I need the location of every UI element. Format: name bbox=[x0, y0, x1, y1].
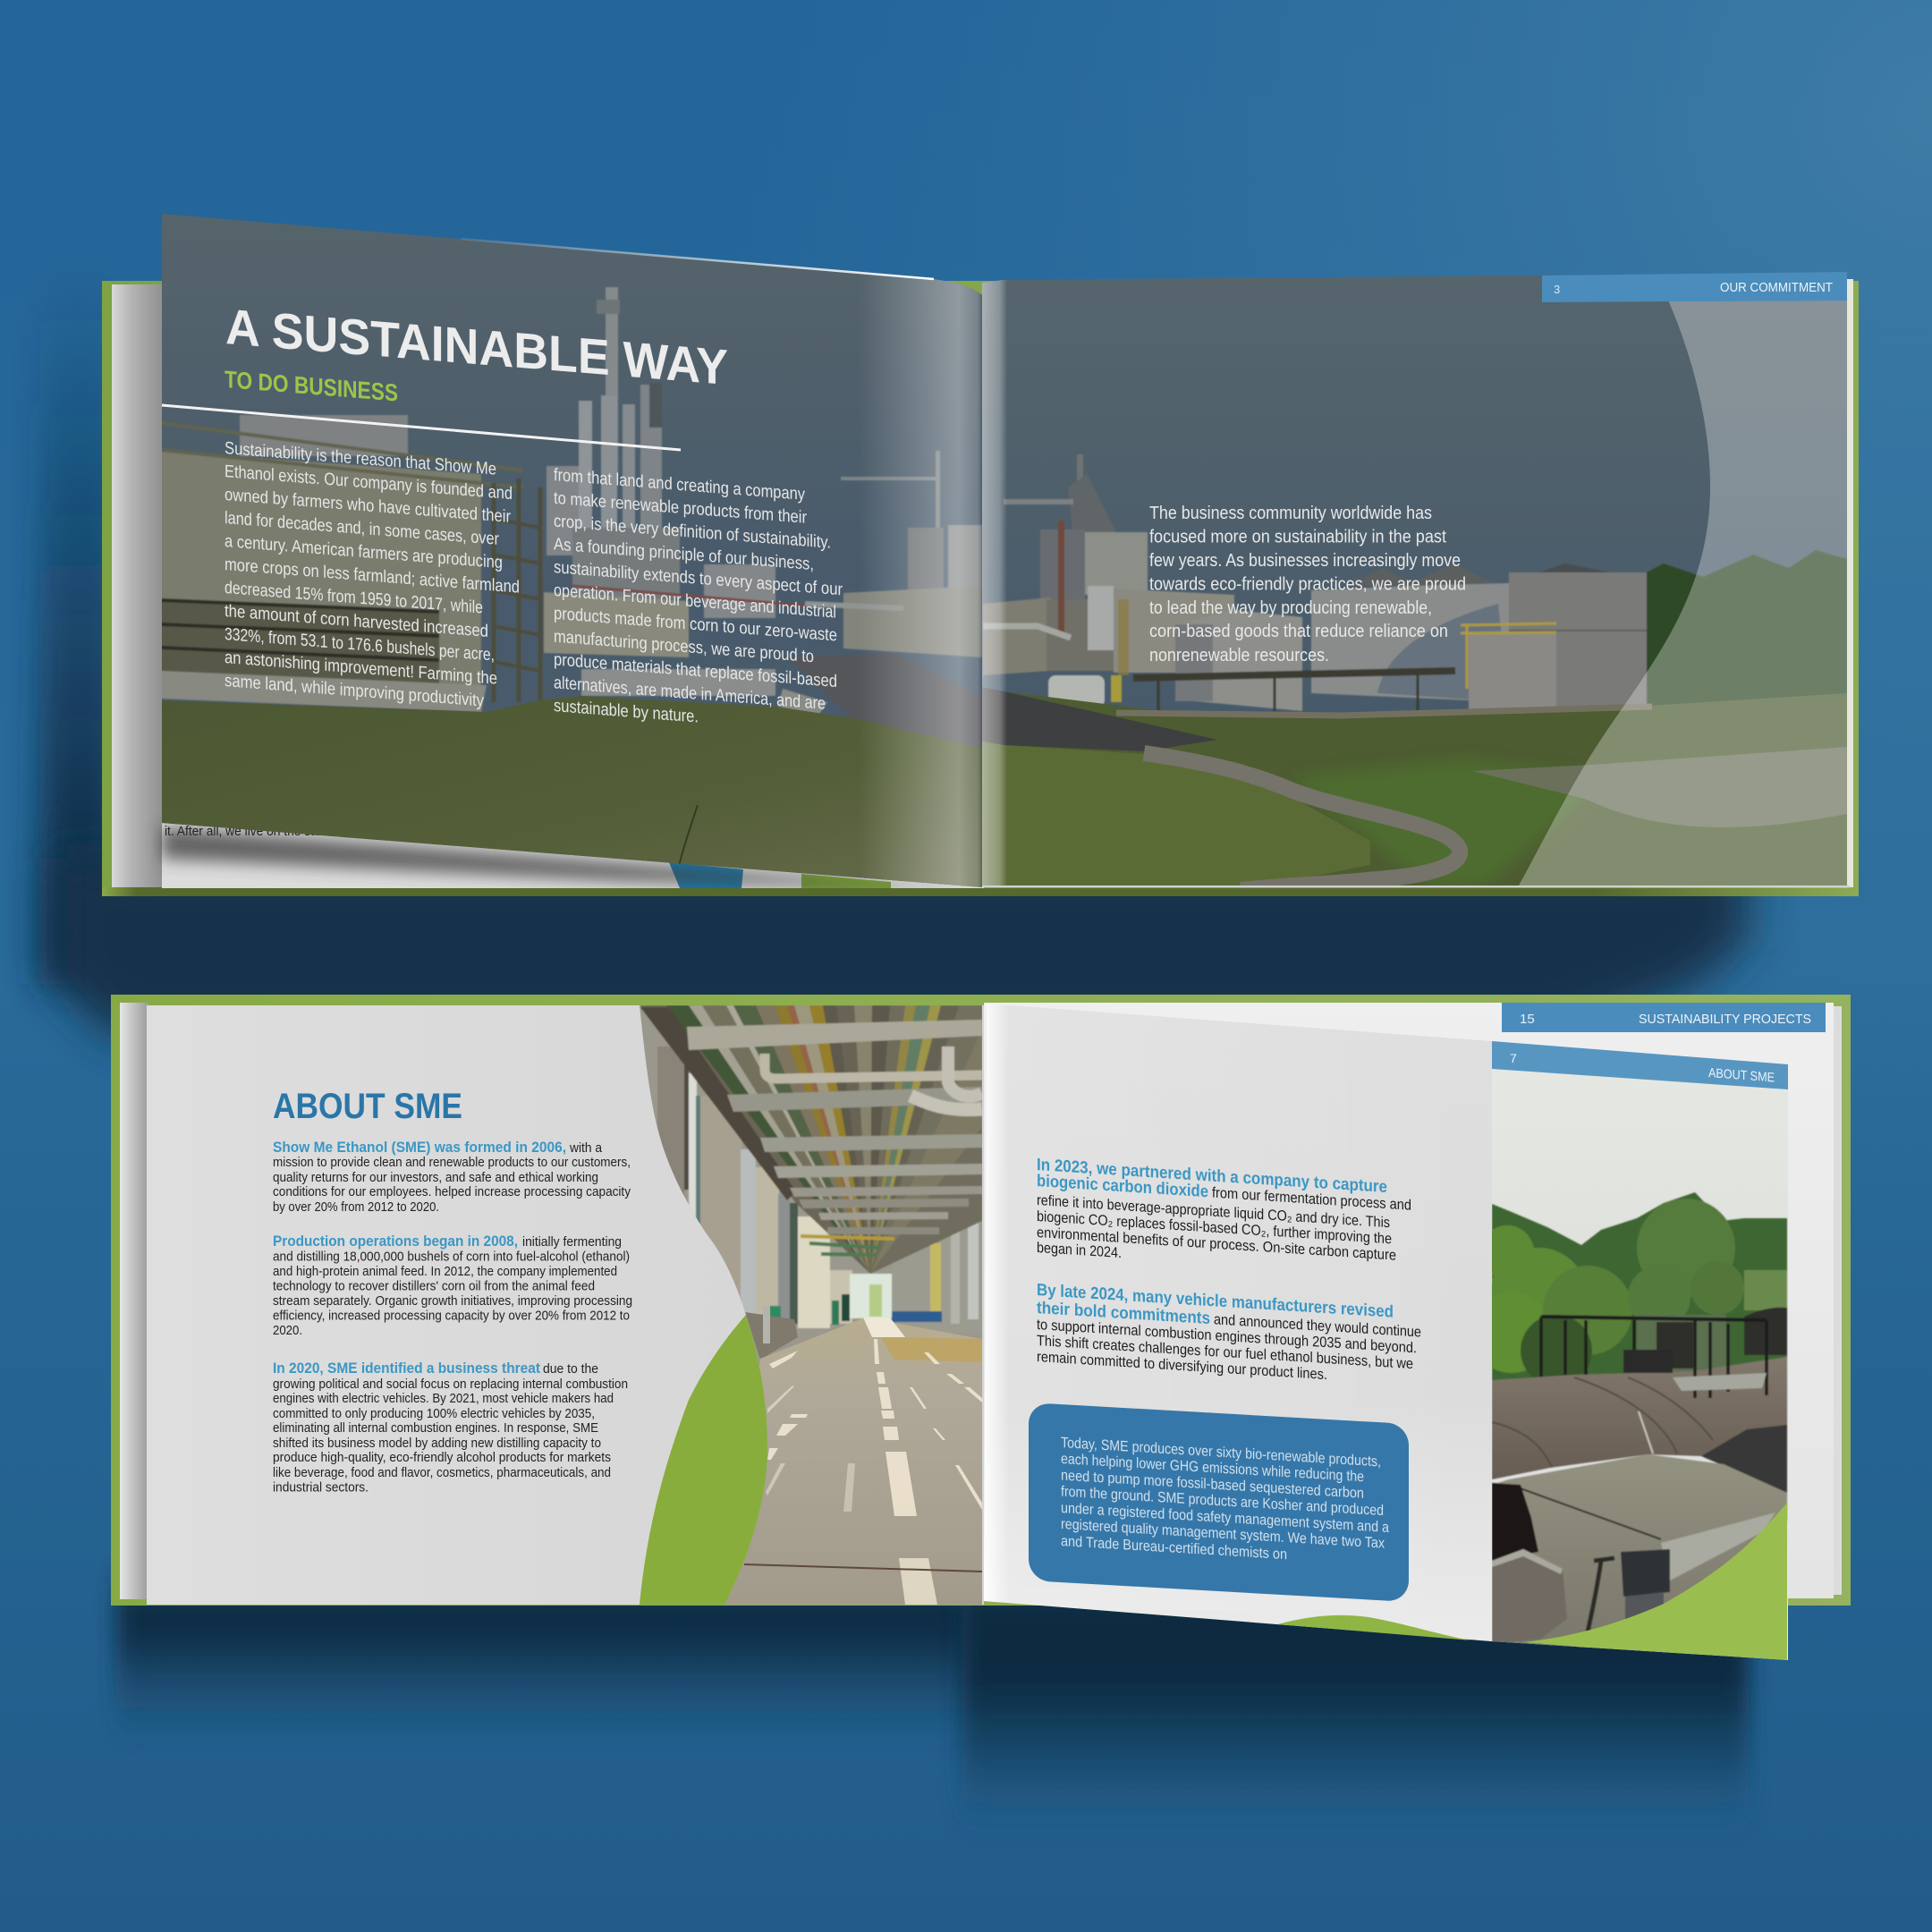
page top edge highlight bbox=[461, 239, 934, 279]
corridor photo bbox=[640, 1005, 984, 1605]
paragraph: business threat: produce high-quality, eco-friendly alcohol products for markets bbox=[273, 1450, 611, 1465]
bottom book green cover bbox=[111, 995, 1851, 1606]
right page text block: few years. As businesses increasingly move bbox=[1149, 551, 1461, 571]
blue callout box: Today, SME produces over sixty bio-renewable products, bbox=[1061, 1435, 1381, 1470]
bottom right under page bbox=[984, 1003, 1842, 1598]
title: a sustainable way: A SUSTAINABLE WAY bbox=[225, 298, 728, 395]
right page photo bbox=[982, 268, 1850, 894]
paragraph: business threat: committed to only producing 100% electric vehicles by 2035, bbox=[273, 1406, 595, 1421]
top book page stack bbox=[112, 284, 165, 887]
green curved blade bbox=[640, 1315, 767, 1605]
header tab: sustainability projects: 15 bbox=[1520, 1012, 1535, 1027]
paragraph: 2023 carbon capture: environmental benefits of our process. On-site carbon capture bbox=[1037, 1224, 1396, 1264]
left page text column 2: sustainable by nature. bbox=[554, 696, 699, 727]
right page text block: towards eco-friendly practices, we are proud bbox=[1149, 574, 1466, 594]
left page text column 1: an astonishing improvement! Farming the bbox=[225, 648, 497, 689]
green wave at bottom of flipped page bbox=[1277, 1615, 1471, 1640]
flipped page base bbox=[984, 1004, 1788, 1660]
paragraph: business threat: industrial sectors. bbox=[273, 1479, 369, 1496]
bottom left page: about SME bbox=[147, 1005, 984, 1605]
right page text block: The business community worldwide has bbox=[1149, 504, 1432, 523]
paragraph: production: Production operations began in 2008, bbox=[273, 1233, 518, 1250]
header tab: sustainability projects bbox=[1502, 1003, 1826, 1032]
left page text column 2: from that land and creating a company bbox=[554, 465, 805, 504]
paragraph: business threat bbox=[273, 1360, 628, 1496]
train tank photo bbox=[1492, 1069, 1788, 1660]
paragraph: late 2024 commitments: remain committed to diversifying our product lines. bbox=[1037, 1349, 1327, 1383]
left page text column 2: to make renewable products from their bbox=[554, 488, 807, 528]
left page text column 2: crop, is the very definition of sustainability. bbox=[554, 512, 831, 553]
paragraph: business threat: shifted its business model by adding new distilling capacity to bbox=[273, 1436, 601, 1451]
header tab: about SME: ABOUT SME bbox=[1708, 1066, 1775, 1086]
heading rule bbox=[162, 405, 681, 450]
paragraph: 2023 carbon capture: refine it into beverage-appropriate liquid CO₂ and dry ice. This bbox=[1037, 1192, 1390, 1231]
left page text column 1: a century. American farmers are producing bbox=[225, 531, 503, 572]
paragraph: formation: by over 20% from 2012 to 2020. bbox=[273, 1199, 439, 1215]
paragraph: 2023 carbon capture: biogenic CO₂ replaces fossil-based CO₂, further improving the bbox=[1037, 1208, 1392, 1247]
paragraph: business threat: In 2020, SME identified a business threat bbox=[273, 1360, 540, 1377]
left page text column 2 bbox=[554, 465, 843, 738]
paragraph: formation: conditions for our employees. helped increase processing capacity bbox=[273, 1184, 631, 1199]
green corner curve bbox=[1523, 1503, 1787, 1664]
left page text column 1: 332%, from 53.1 to 176.6 bushels per acre, bbox=[225, 624, 495, 665]
left page photo bbox=[161, 206, 985, 903]
paragraph: late 2024 commitments: and announced they would continue bbox=[1214, 1311, 1421, 1341]
right page text block: to lead the way by producing renewable, bbox=[1149, 598, 1432, 618]
left page text column 2: alternatives, are made in America, and are bbox=[554, 673, 826, 714]
paragraph: 2023 carbon capture: from our fermentation process and bbox=[1212, 1185, 1411, 1214]
right page text block bbox=[1149, 504, 1466, 665]
left page text column 1 bbox=[225, 438, 520, 714]
bottom book mockup bbox=[111, 995, 1851, 1664]
right page text block: focused more on sustainability in the past bbox=[1149, 528, 1446, 547]
paragraph: business threat: eliminating all internal combustion engines. In response, SME bbox=[273, 1420, 598, 1436]
heading: about SME: ABOUT SME bbox=[273, 1087, 462, 1126]
top left page: plant photo with title and text bbox=[161, 206, 985, 903]
left page text column 2: sustainability extends to every aspect of our bbox=[554, 557, 843, 599]
paragraph: business threat: like beverage, food and flavor, cosmetics, pharmaceuticals, and bbox=[273, 1465, 611, 1480]
blue callout box: under a registered food safety management system and a bbox=[1061, 1500, 1390, 1536]
left page text column 1: decreased 15% from 1959 to 2017, while bbox=[225, 578, 483, 618]
header tab: our commitment bbox=[1542, 272, 1847, 302]
bottom flipped page bbox=[984, 1002, 1788, 1664]
left page text column 1: Ethanol exists. Our company is founded and bbox=[225, 462, 513, 504]
paragraph: production: and distilling 18,000,000 bushels of corn into fuel-alcohol (ethanol) bbox=[273, 1249, 630, 1265]
blue callout box: each helping lower GHG emissions while reducing the bbox=[1061, 1451, 1364, 1485]
left page text column 1: Sustainability is the reason that Show Me bbox=[225, 438, 496, 479]
right edge of pages bbox=[1847, 279, 1853, 887]
right page text block: corn-based goods that reduce reliance on bbox=[1149, 622, 1448, 641]
header tab: about SME: 7 bbox=[1510, 1051, 1517, 1065]
blue callout box: from the ground. SME products are Kosher and produced bbox=[1061, 1484, 1384, 1519]
paragraph: formation: with a bbox=[569, 1140, 603, 1156]
header tab: about SME bbox=[1492, 1041, 1788, 1089]
bottom book page stack bbox=[120, 1003, 148, 1599]
left page text column 1: more crops on less farmland; active farmland bbox=[225, 555, 520, 597]
subtitle: to do business: TO DO BUSINESS bbox=[225, 366, 398, 407]
top book revealed under page: it. After all, we live on the same bbox=[165, 825, 335, 839]
top book green cover bbox=[102, 281, 1859, 896]
header tab: sustainability projects: SUSTAINABILITY PROJECTS bbox=[1639, 1012, 1811, 1027]
top book revealed under page bbox=[152, 822, 984, 888]
left page text column 2: products made from corn to our zero-waste bbox=[554, 604, 837, 646]
paragraph: production: stream separately. Organic growth initiatives, improving processing bbox=[273, 1293, 632, 1309]
paragraph: 2023 carbon capture: biogenic carbon dioxide bbox=[1037, 1172, 1208, 1201]
left page text column 2: produce materials that replace fossil-based bbox=[554, 649, 837, 691]
blue callout box: registered quality management system. We have two Tax bbox=[1061, 1516, 1385, 1552]
paragraph: 2023 carbon capture bbox=[1037, 1156, 1411, 1280]
paragraph: 2023 carbon capture: In 2023, we partnered with a company to capture bbox=[1037, 1156, 1387, 1197]
left page text column 2: manufacturing process, we are proud to bbox=[554, 627, 814, 666]
paragraph: production: efficiency, increased processing capacity by over 20% from 2012 to bbox=[273, 1309, 630, 1324]
paragraph: late 2024 commitments: to support internal combustion engines through 2035 and beyond. bbox=[1037, 1317, 1417, 1356]
blue callout box: and Trade Bureau-certified chemists on bbox=[1061, 1533, 1287, 1563]
left page text column 1: the amount of corn harvested increased bbox=[225, 601, 488, 641]
paragraph: business threat: engines with electric vehicles. By 2021, most vehicle makers had bbox=[273, 1391, 614, 1406]
paragraph: late 2024 commitments: By late 2024, many vehicle manufacturers revised bbox=[1037, 1281, 1394, 1322]
paragraph: formation: mission to provide clean and renewable products to our customers, bbox=[273, 1155, 631, 1170]
top book mockup bbox=[102, 206, 1859, 903]
blue callout box bbox=[1029, 1402, 1409, 1602]
left page background bbox=[147, 1005, 984, 1605]
paragraph: production: 2020. bbox=[273, 1323, 302, 1338]
paragraph: production: technology to recover distillers' corn oil from the animal feed bbox=[273, 1279, 595, 1293]
paragraph: formation bbox=[273, 1140, 631, 1215]
header tab: our commitment: OUR COMMITMENT bbox=[1720, 281, 1833, 295]
right page text block: nonrenewable resources. bbox=[1149, 646, 1329, 665]
left page text column 1: owned by farmers who have cultivated their bbox=[225, 485, 511, 527]
blue callout box: need to pump more fossil-based sequestered carbon bbox=[1061, 1468, 1364, 1502]
paragraph: business threat: due to the bbox=[543, 1361, 598, 1377]
paragraph: late 2024 commitments: This shift creates challenges for our fuel ethanol business, but we bbox=[1037, 1333, 1413, 1372]
left page text column 2: As a founding principle of our business, bbox=[554, 534, 814, 574]
left page text column 2: operation. From our beverage and industrial bbox=[554, 580, 836, 623]
paragraph: late 2024 commitments: their bold commitments bbox=[1037, 1299, 1210, 1328]
paragraph: production: and high-protein animal feed. In 2012, the company implemented bbox=[273, 1264, 617, 1279]
left page text column 1: land for decades and, in some cases, over bbox=[225, 508, 499, 549]
left page text column 1: same land, while improving productivity bbox=[225, 671, 484, 711]
paragraph: formation: Show Me Ethanol (SME) was formed in 2006, bbox=[273, 1140, 566, 1156]
header tab: our commitment: 3 bbox=[1554, 283, 1560, 296]
paragraph: late 2024 commitments bbox=[1037, 1281, 1421, 1389]
top right page: plant photo with tanks bbox=[982, 268, 1853, 894]
paragraph: production bbox=[273, 1233, 632, 1338]
paragraph: formation: quality returns for our investors, and safe and ethical working bbox=[273, 1170, 598, 1185]
paragraph: production: initially fermenting bbox=[522, 1234, 622, 1250]
translucent curved overlay bbox=[1518, 268, 1847, 887]
paragraph: business threat: growing political and social focus on replacing internal combustion bbox=[273, 1377, 628, 1392]
paragraph: 2023 carbon capture: began in 2024. bbox=[1037, 1240, 1122, 1261]
